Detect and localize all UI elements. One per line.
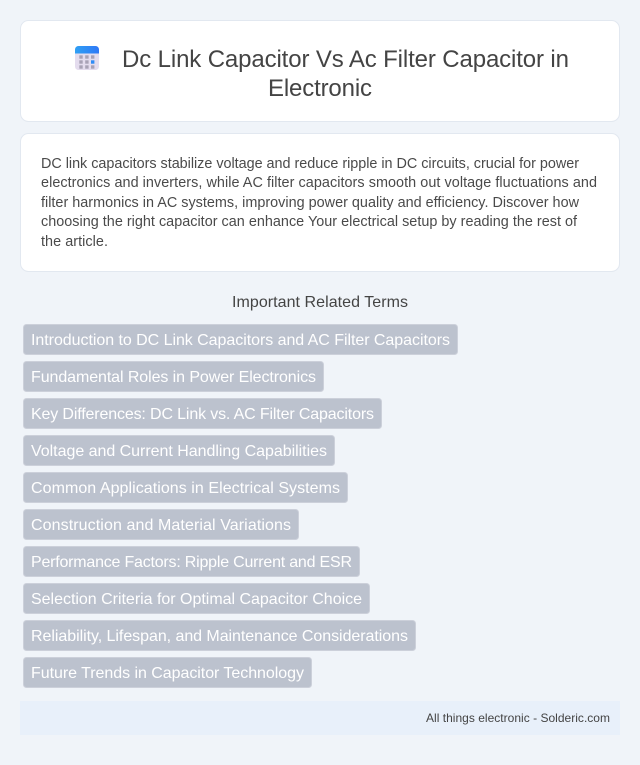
panel: summary card bbox=[20, 134, 620, 272]
tag: reliability: Reliability, Lifespan, and Maintenance Considerations bbox=[31, 628, 408, 645]
heading: important related terms: Important Related Terms bbox=[232, 294, 408, 311]
tag: construction: Construction and Material Variations bbox=[31, 517, 291, 534]
list of related term tags bbox=[24, 324, 458, 688]
tag: key differences bbox=[24, 398, 382, 428]
footer bbox=[20, 701, 620, 735]
tag: fundamental roles bbox=[24, 362, 324, 392]
tag: construction bbox=[24, 510, 298, 540]
tag: voltage and current: Voltage and Current Handling Capabilities bbox=[31, 443, 327, 460]
summary text: the article. bbox=[41, 234, 108, 250]
footer: All things electronic - Solderic.com bbox=[426, 711, 610, 725]
title: Dc Link Capacitor Vs Ac Filter Capacitor in bbox=[122, 46, 569, 73]
tag: introduction bbox=[24, 324, 458, 354]
summary text: choosing the right capacitor can enhance Your electrical setup by reading the rest of bbox=[41, 214, 578, 230]
tag: future trends: Future Trends in Capacitor Technology bbox=[31, 665, 304, 682]
tag: common applications: Common Applications in Electrical Systems bbox=[31, 480, 340, 497]
title bbox=[122, 46, 569, 102]
tag: introduction: Introduction to DC Link Capacitors and AC Filter Capacitors bbox=[31, 332, 450, 349]
title: Electronic bbox=[268, 75, 372, 102]
summary text: DC link capacitors stabilize voltage and reduce ripple in DC circuits, crucial for power bbox=[41, 156, 579, 172]
panel: title card bbox=[20, 20, 620, 122]
tag: voltage and current bbox=[24, 436, 334, 466]
summary text: filter harmonics in AC systems, improving power quality and efficiency. Discover how bbox=[41, 195, 580, 211]
icon: calendar bbox=[75, 46, 99, 70]
tag: performance factors bbox=[24, 546, 360, 576]
tag: fundamental roles: Fundamental Roles in Power Electronics bbox=[31, 369, 316, 386]
tag: key differences: Key Differences: DC Link vs. AC Filter Capacitors bbox=[31, 406, 374, 423]
tag: reliability bbox=[24, 620, 416, 650]
tag: selection criteria: Selection Criteria for Optimal Capacitor Choice bbox=[31, 591, 362, 608]
summary text: electronics and inverters, while AC filter capacitors smooth out voltage fluctuations and bbox=[41, 175, 597, 191]
summary text bbox=[41, 156, 597, 250]
tag: selection criteria bbox=[24, 584, 370, 614]
tag: common applications bbox=[24, 472, 348, 502]
tag: future trends bbox=[24, 658, 312, 688]
tag: performance factors: Performance Factors: Ripple Current and ESR bbox=[31, 554, 352, 571]
